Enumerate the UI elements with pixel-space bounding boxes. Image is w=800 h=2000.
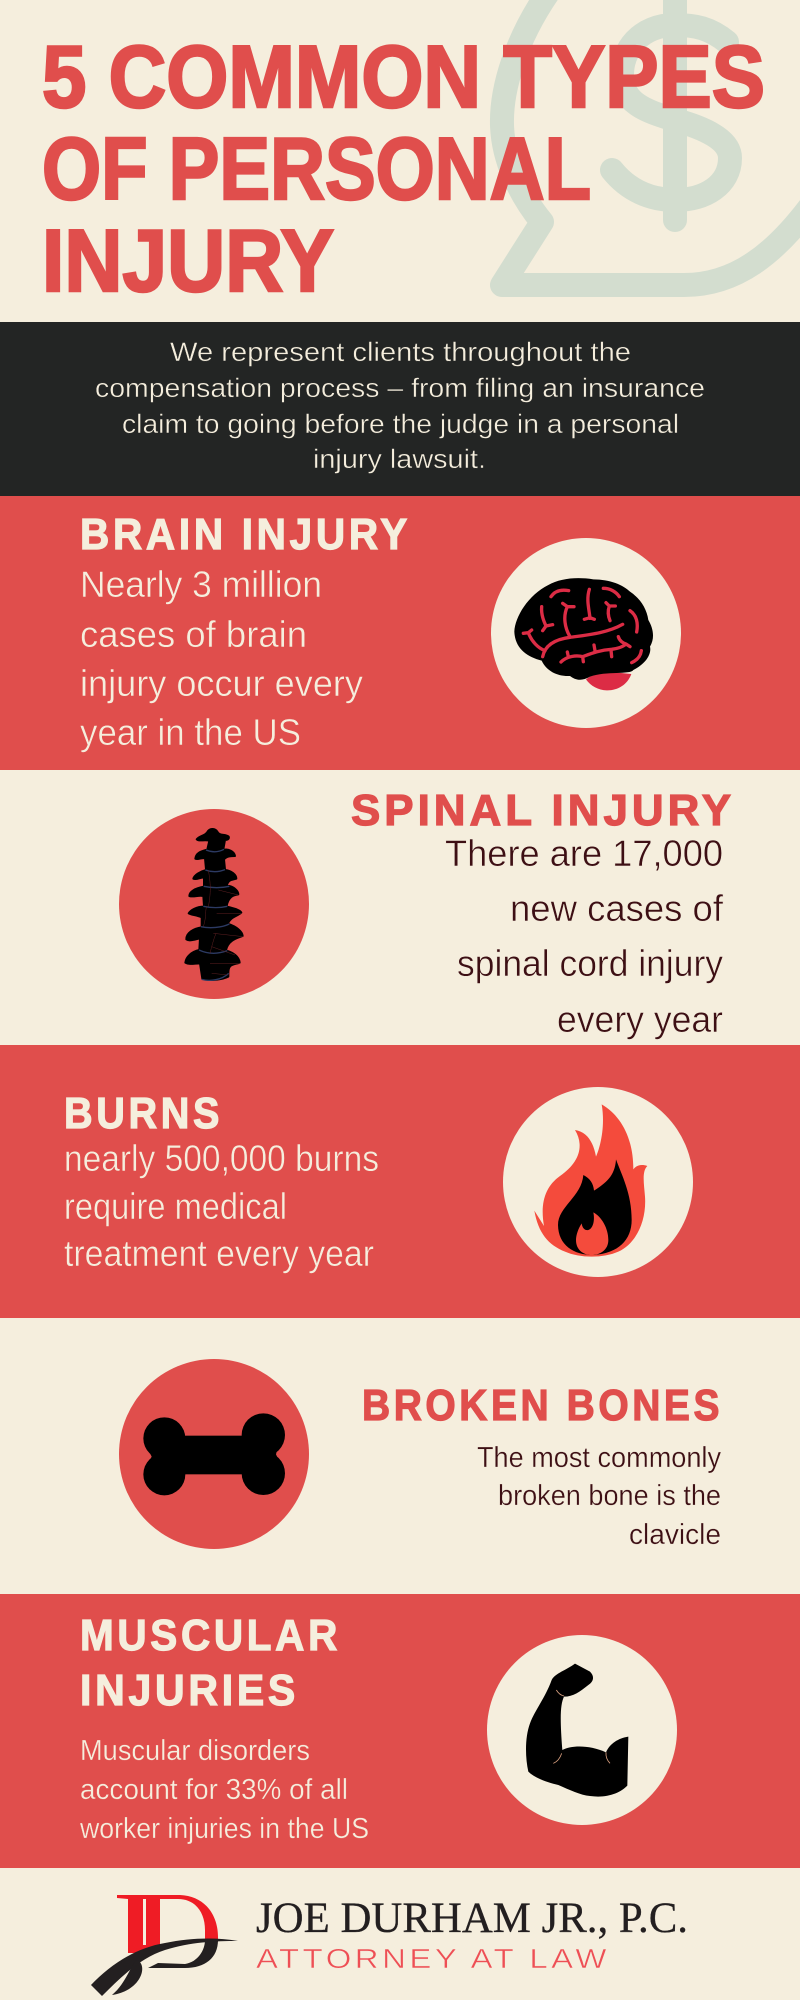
text: muscular injuries fact: Muscular disorders (80, 1735, 310, 1767)
text: brain injury fact: year in the US (80, 712, 301, 753)
icon: brain (491, 538, 681, 728)
text: broken bones fact: clavicle (629, 1519, 721, 1551)
intro text: injury lawsuit. (313, 444, 486, 474)
icon: bone (119, 1359, 309, 1549)
heading: muscular injuries: MUSCULAR (80, 1611, 341, 1660)
text: burns fact: treatment every year (64, 1233, 374, 1274)
text: broken bones fact: The most commonly (477, 1442, 721, 1474)
heading: broken bones: BROKEN BONES (362, 1381, 723, 1430)
logo: Joe Durham Jr., P.C. (91, 1895, 688, 1996)
icon: money bag with dollar sign (502, 0, 800, 285)
text: muscular injuries fact: worker injuries in the US (79, 1813, 369, 1845)
panel: brain injury (0, 496, 800, 770)
panel: introduction (0, 322, 800, 496)
text: burns fact (64, 1138, 379, 1274)
title (42, 27, 765, 310)
icon: flame (503, 1087, 693, 1277)
firm name: JOE DURHAM JR., P.C. (256, 1895, 688, 1942)
panel: burns (0, 1045, 800, 1318)
intro text: We represent clients throughout the (170, 337, 631, 367)
text: spinal injury fact: spinal cord injury (457, 943, 723, 984)
text: spinal injury fact (445, 833, 724, 1040)
heading: muscular injuries: INJURIES (80, 1666, 299, 1715)
panel: broken bones (0, 1318, 800, 1594)
title: OF PERSONAL (42, 119, 591, 218)
text: broken bones fact: broken bone is the (498, 1480, 721, 1512)
text: brain injury fact (80, 564, 363, 753)
text: broken bones fact (477, 1442, 721, 1551)
text: burns fact: require medical (64, 1186, 287, 1227)
intro text (95, 337, 705, 474)
icon: flexed arm (487, 1635, 677, 1825)
icon: spine (119, 809, 309, 999)
heading: spinal injury: SPINAL INJURY (351, 786, 735, 835)
panel: spinal injury (0, 770, 800, 1045)
logo mark: JD monogram (91, 1895, 238, 1996)
intro text: claim to going before the judge in a personal (122, 409, 679, 439)
title: INJURY (42, 211, 334, 310)
text: muscular injuries fact: account for 33% of all (80, 1774, 348, 1806)
tagline: ATTORNEY AT LAW (256, 1943, 610, 1974)
heading: burns: BURNS (64, 1089, 223, 1138)
text: spinal injury fact: new cases of (510, 888, 724, 929)
panel: muscular injuries (0, 1594, 800, 1868)
text: brain injury fact: injury occur every (80, 663, 363, 704)
heading: brain injury: BRAIN INJURY (80, 510, 411, 559)
header panel (0, 0, 800, 322)
text: brain injury fact: Nearly 3 million (80, 564, 322, 605)
intro text: compensation process – from filing an insurance (95, 373, 705, 403)
text: spinal injury fact: There are 17,000 (445, 833, 723, 874)
text: brain injury fact: cases of brain (80, 614, 307, 655)
heading: muscular injuries (80, 1611, 341, 1715)
text: muscular injuries fact (79, 1735, 369, 1845)
text: burns fact: nearly 500,000 burns (64, 1138, 379, 1179)
text: spinal injury fact: every year (557, 999, 723, 1040)
